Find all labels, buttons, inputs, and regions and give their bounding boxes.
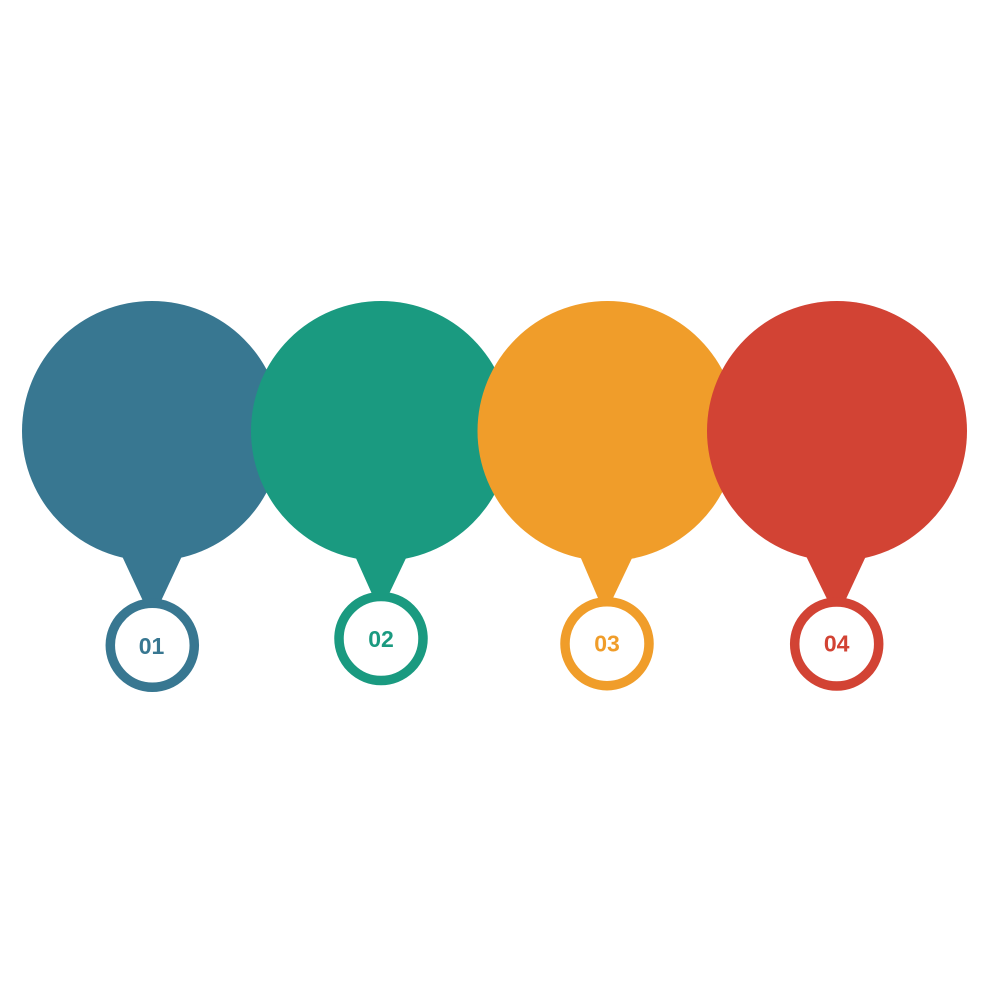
- pin 03 ring: [565, 602, 649, 686]
- pin 02 ring: [339, 596, 423, 680]
- pin 03 number: 03: [594, 631, 620, 657]
- pin 04 bubble: [707, 301, 967, 561]
- pin 02 bubble: [251, 301, 511, 561]
- pin 03 bubble: [478, 301, 738, 561]
- pin 01: [22, 301, 282, 687]
- pin 01 pointer: [122, 556, 182, 601]
- pin 02 pointer: [355, 556, 407, 594]
- pin 01 number: 01: [139, 633, 164, 659]
- pin 02: [251, 301, 511, 680]
- pin 04 ring: [795, 602, 879, 686]
- pin 04 pointer: [806, 556, 866, 599]
- pin 03: [478, 301, 738, 686]
- pin 04: [707, 301, 967, 686]
- pin 03 pointer: [580, 556, 633, 598]
- pin 01 ring: [110, 603, 194, 687]
- pin 01 bubble: [22, 301, 282, 561]
- pin 02 number: 02: [368, 626, 394, 652]
- pin 04 number: 04: [824, 631, 850, 657]
